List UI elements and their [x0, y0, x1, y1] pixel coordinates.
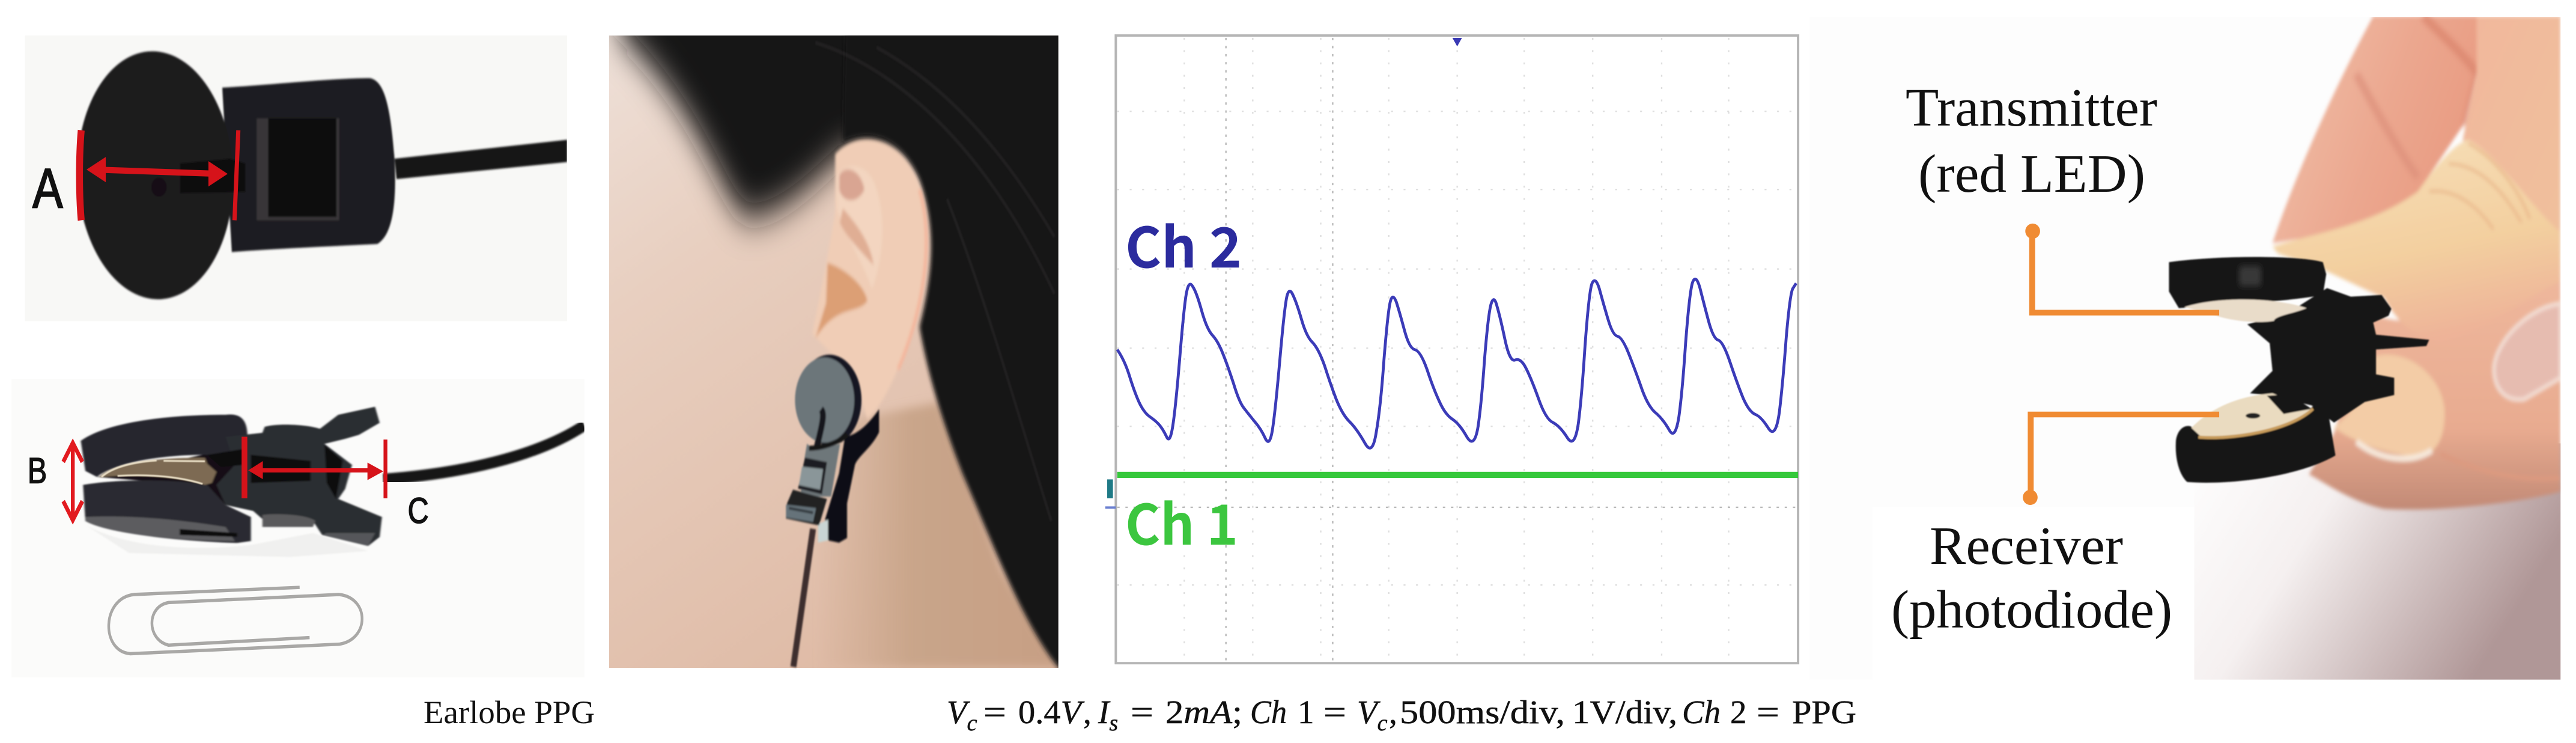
- caption: measurement conditions: c: [1378, 711, 1388, 736]
- label: Transmitter (red LED): (red LED): [1918, 144, 2145, 204]
- hair: dark mass: [841, 35, 1059, 668]
- panel: side view of clip with dimensions B, C and paperclip: [381, 423, 585, 482]
- dimension A: red bars and arrow: [79, 130, 238, 220]
- dimension B arrow: [63, 443, 82, 520]
- disc: [797, 355, 861, 445]
- clip front body: [801, 444, 840, 497]
- caption: measurement conditions: ,: [1083, 694, 1092, 730]
- caption: measurement conditions: =: [1757, 694, 1779, 730]
- label: Transmitter (red LED): [1906, 78, 2157, 204]
- clip rear arm: [825, 409, 879, 543]
- caption: Earlobe PPG: Earlobe PPG: [424, 694, 595, 730]
- Ch 2 waveform: [1117, 279, 1796, 448]
- caption: measurement conditions: s: [1109, 711, 1118, 736]
- label: Ch 2: Ch 2: [1125, 204, 1242, 284]
- label C: C: [408, 491, 429, 531]
- caption: measurement conditions: 2mA;: [1165, 694, 1242, 730]
- caption: measurement conditions: Ch: [1250, 694, 1287, 730]
- Ch 1 flat trace: [1117, 472, 1798, 478]
- panel: oscilloscope trace: [1105, 35, 1798, 663]
- caption: measurement conditions: =: [983, 694, 1006, 730]
- transmitter leader line: [2025, 224, 2219, 313]
- panel: hand holding sensor with callouts: [2167, 17, 2560, 680]
- label B: B: [28, 451, 47, 491]
- panel: photo of sensor clipped to earlobe: [609, 35, 1059, 668]
- dimension C: bars and arrow: [245, 437, 386, 498]
- hand shadow: [2194, 444, 2560, 680]
- trigger marker: [1453, 38, 1462, 46]
- caption: measurement conditions: c: [967, 711, 977, 736]
- icon: paperclip: [109, 587, 362, 653]
- caption: measurement conditions: PPG: [1792, 694, 1856, 730]
- middle finger tip: [2334, 355, 2444, 457]
- caption: measurement conditions: 2: [1730, 694, 1747, 730]
- ring-side finger: [2462, 16, 2560, 240]
- label: Receiver (photodiode): [1891, 516, 2172, 640]
- clip body: [2247, 288, 2429, 423]
- receiver leader line: [2023, 415, 2219, 505]
- cable: [794, 529, 813, 667]
- thumb nail: [2494, 304, 2560, 400]
- caption: measurement conditions: V: [947, 694, 967, 730]
- label: Receiver (photodiode): Receiver: [1930, 516, 2123, 576]
- label A: A: [32, 157, 63, 219]
- caption: measurement conditions: 500ms/div,: [1400, 694, 1565, 730]
- hair: soft hairline: [619, 0, 999, 218]
- panel: top view of earlobe clip with dimension A: [25, 35, 567, 321]
- caption: measurement conditions: 1: [1298, 694, 1314, 730]
- white label patch: [1873, 507, 2194, 686]
- caption: measurement conditions: 0.4V: [1018, 694, 1085, 730]
- label: Transmitter (red LED): Transmitter: [1906, 78, 2157, 138]
- channel 1 marker: [1105, 479, 1116, 509]
- thumb: [2273, 139, 2560, 341]
- caption: measurement conditions: 1V/div,: [1572, 694, 1677, 730]
- caption: measurement conditions: I: [1098, 694, 1109, 730]
- lower metal contact: [2192, 393, 2313, 439]
- caption: measurement conditions: V: [1357, 694, 1378, 730]
- caption: measurement conditions: =: [1323, 694, 1346, 730]
- upper metal contact: [2184, 299, 2307, 322]
- upper pad: [2169, 257, 2326, 308]
- label: Receiver (photodiode): (photodiode): [1891, 580, 2172, 640]
- caption: measurement conditions: Ch: [1682, 694, 1721, 730]
- lower pad: [2176, 405, 2336, 483]
- ear: [812, 139, 926, 419]
- caption: measurement conditions: ,: [1389, 694, 1397, 730]
- lower finger nail edge: [2356, 442, 2432, 459]
- clip: side view body: [80, 407, 382, 557]
- caption: measurement conditions: [947, 694, 1856, 736]
- palm and lower hand: [2309, 278, 2560, 510]
- caption: measurement conditions: =: [1131, 694, 1153, 730]
- neck shading: [815, 403, 1059, 668]
- pink index finger: [2273, 16, 2479, 243]
- clip on earlobe with cable: [786, 355, 879, 667]
- label: Ch 1: Ch 1: [1125, 481, 1238, 561]
